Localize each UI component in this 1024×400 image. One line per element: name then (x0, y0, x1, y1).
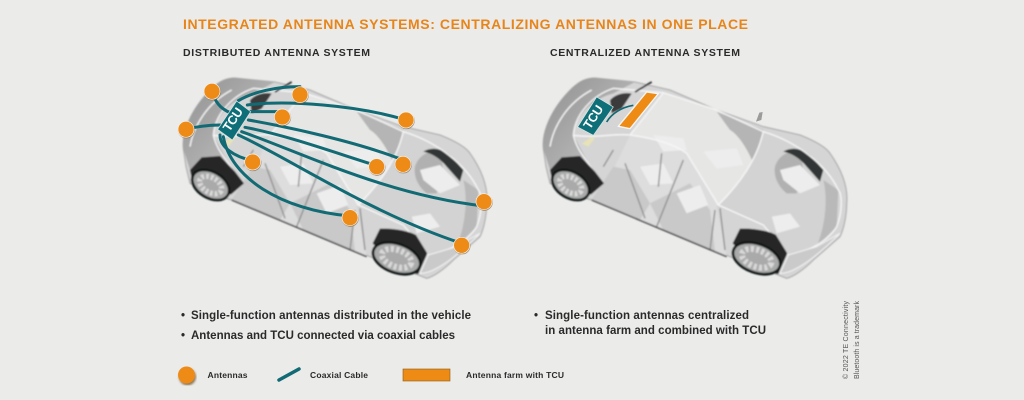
TCU box: TCU (581, 103, 606, 132)
TCU box (218, 101, 251, 140)
diagram: distributed antenna system car (178, 78, 492, 280)
roof antenna fin (756, 112, 763, 122)
legend: antenna farm: Antenna farm with TCU (466, 370, 564, 380)
legend: coaxial cable: Coaxial Cable (310, 370, 368, 380)
bullets: distributed: • (181, 330, 185, 342)
antennas (178, 83, 492, 253)
bullets: distributed (181, 310, 471, 342)
diagram: centralized antenna system car (543, 78, 847, 280)
legend: antennas: Antennas (208, 370, 248, 380)
trademark note: Bluetooth is a trademark (854, 300, 861, 379)
legend: antennas (178, 366, 248, 384)
bullets: centralized: • (534, 310, 538, 322)
legend: antenna farm (403, 369, 564, 381)
bullets: centralized: Single-function antennas centralized (545, 310, 749, 322)
legend: coaxial cable (279, 369, 368, 380)
copyright note: © 2022 TE Connectivity (842, 300, 850, 379)
coaxial cables (186, 87, 484, 243)
bullets: centralized: in antenna farm and combined with TCU (545, 325, 766, 337)
TCU box (578, 97, 613, 135)
bullets: centralized (534, 310, 766, 337)
heading: distributed antenna system: DISTRIBUTED ANTENNA SYSTEM (183, 47, 370, 59)
heading: centralized antenna system: CENTRALIZED ANTENNA SYSTEM (550, 47, 740, 59)
antenna farm (618, 92, 658, 129)
bullets: distributed: Single-function antennas distributed in the vehicle (191, 310, 471, 322)
title: INTEGRATED ANTENNA SYSTEMS: CENTRALIZING ANTENNAS IN ONE PLACE (183, 16, 748, 32)
bullets: distributed: Antennas and TCU connected via coaxial cables (191, 330, 455, 342)
TCU box: TCU (220, 105, 246, 134)
bullets: distributed: • (181, 310, 185, 322)
coaxial cable (607, 105, 633, 122)
